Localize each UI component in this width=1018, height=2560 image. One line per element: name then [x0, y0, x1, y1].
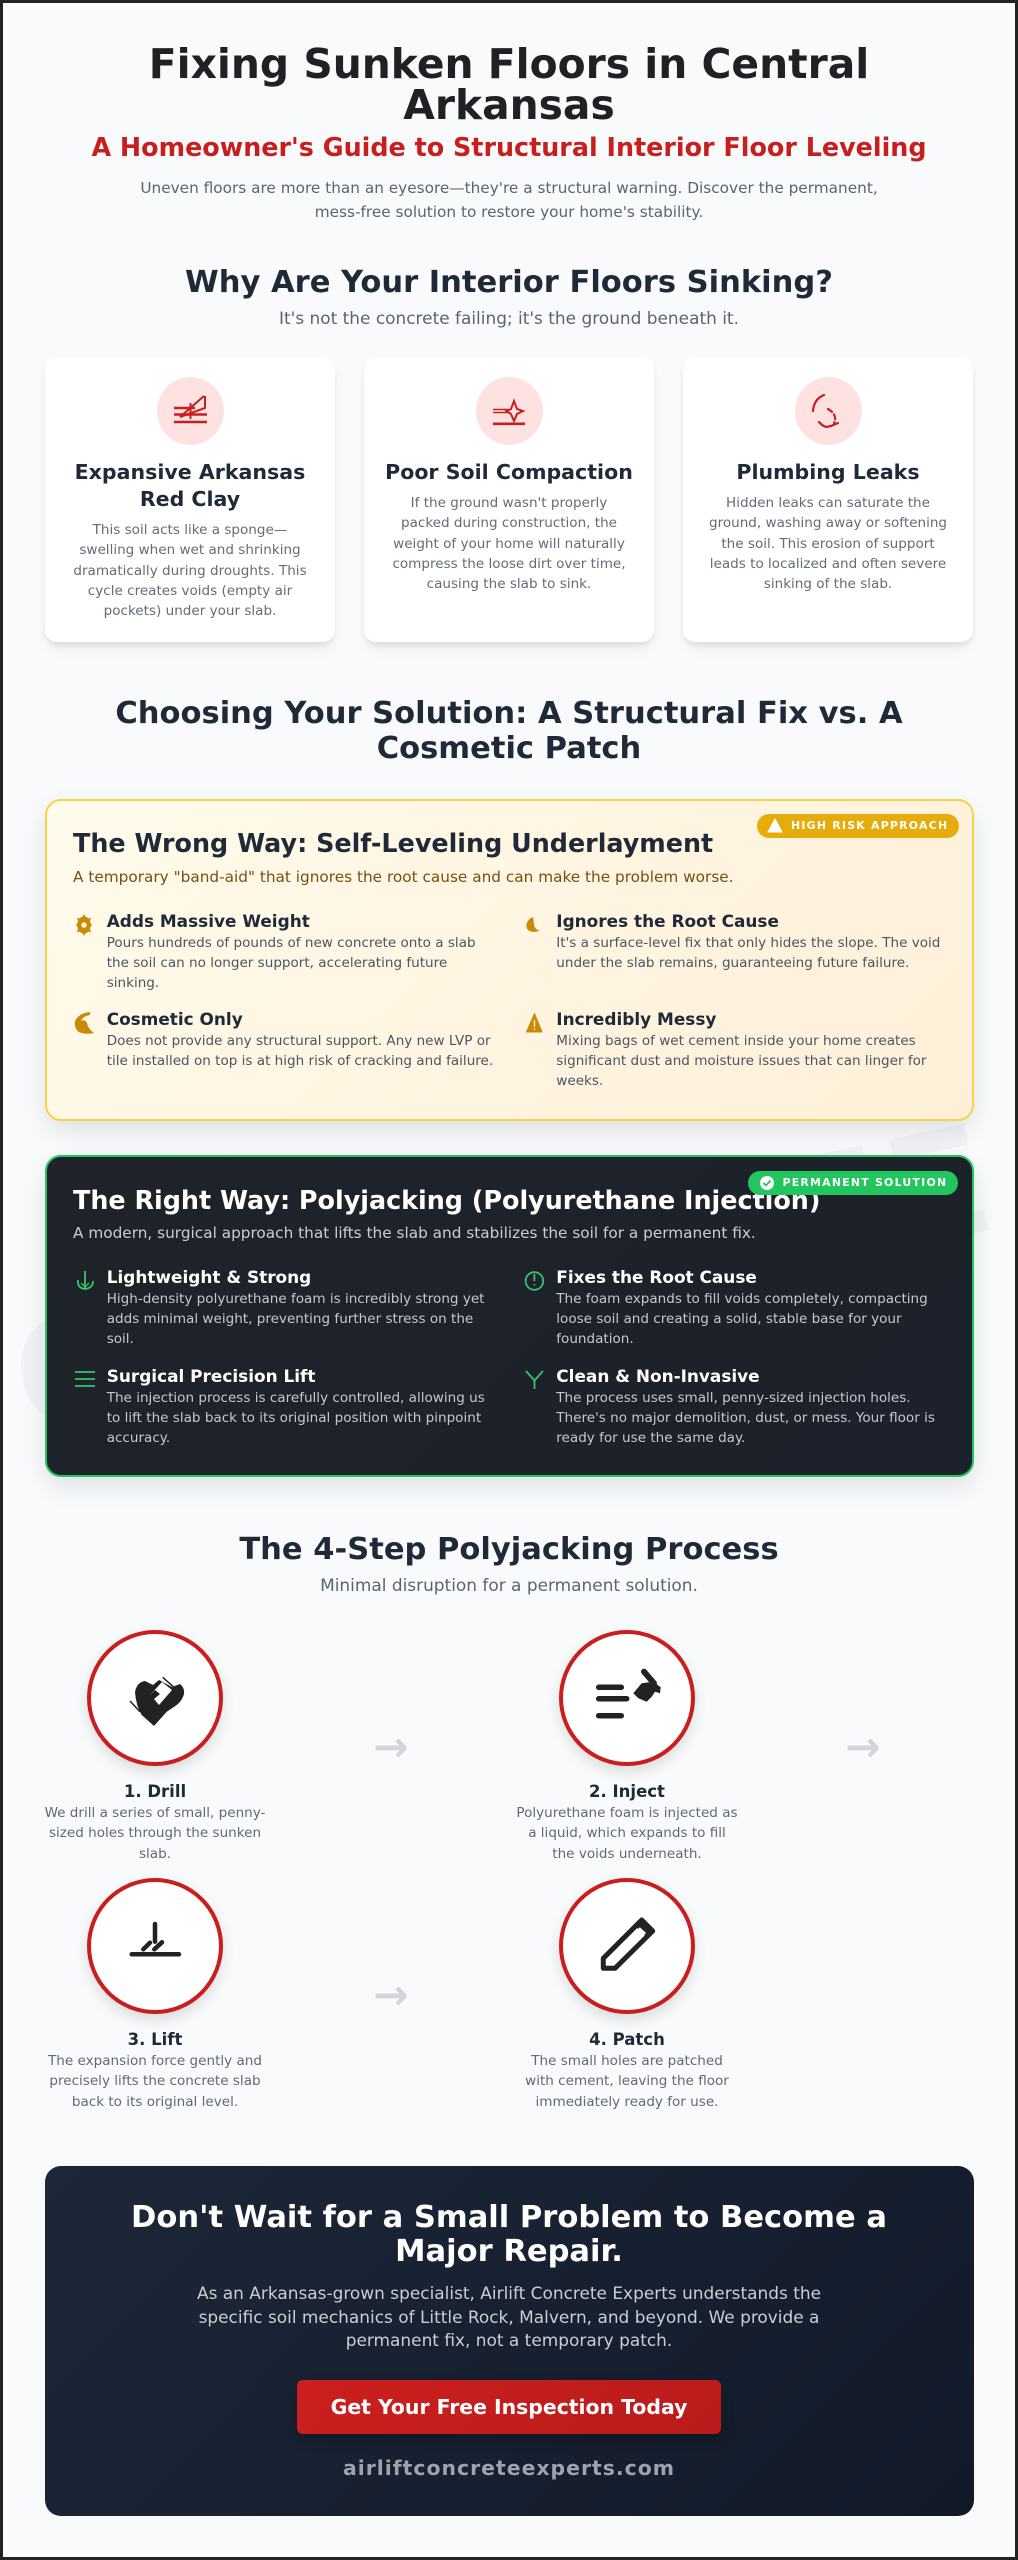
item: ignores root cause: It's a surface-level fix that only hides the slope. The void: [556, 935, 940, 951]
item: fixes root cause: The foam expands to fill voids completely, compacting: [556, 1291, 928, 1307]
card text: compress the loose dirt over time,: [392, 556, 626, 572]
cta text: permanent fix, not a temporary patch.: [346, 2330, 672, 2350]
cta heading: [131, 2200, 887, 2269]
title: [149, 40, 869, 129]
icon: pencil: [559, 1878, 695, 2014]
step text: precisely lifts the concrete slab: [49, 2073, 261, 2089]
icon: fork: [525, 1370, 544, 1389]
panel subtitle: A temporary "band-aid" that ignores the root cause and can make the problem worse.: [73, 868, 734, 886]
section heading: choosing your solution: [115, 696, 903, 766]
item: adds massive weight: Adds Massive Weight: [107, 911, 310, 931]
step title: 4. Patch: [589, 2030, 665, 2048]
item: incredibly messy: weeks.: [556, 1073, 603, 1089]
item: lightweight and strong: Lightweight & Strong: [107, 1267, 311, 1287]
card text: causing the slab to sink.: [427, 576, 591, 592]
title: Fixing Sunken Floors in Central: [149, 40, 869, 88]
item: fixes root cause: loose soil and creating a solid, stable base for your: [556, 1311, 902, 1327]
item: fixes root cause: Fixes the Root Cause: [556, 1267, 757, 1287]
item: ignores root cause: [526, 911, 940, 971]
card title: Poor Soil Compaction: [385, 460, 633, 484]
card: poor compaction: [364, 357, 654, 642]
panel subtitle: A modern, surgical approach that lifts the slab and stabilizes the soil for a permanent fix.: [73, 1224, 756, 1242]
item: lightweight and strong: [77, 1267, 484, 1347]
step text: [516, 1805, 738, 1862]
subheading: It's not the concrete failing; it's the ground beneath it.: [279, 308, 739, 328]
item: surgical precision lift: The injection process is carefully controlled, allowing us: [107, 1390, 485, 1406]
intro text: [140, 179, 878, 221]
item: clean and non-invasive: ready for use the same day.: [556, 1430, 745, 1446]
subheading: Minimal disruption for a permanent solution.: [320, 1575, 698, 1595]
call to action panel: [44, 2166, 974, 2516]
card text: [392, 495, 626, 592]
item: cosmetic only: Cosmetic Only: [107, 1009, 243, 1029]
step text: We drill a series of small, penny-: [45, 1805, 265, 1821]
item: adds massive weight: Pours hundreds of pounds of new concrete onto a slab: [107, 935, 476, 951]
card text: ground, washing away or softening: [709, 515, 947, 531]
cta button: [297, 2380, 721, 2434]
icon: warning triangle: [526, 1013, 542, 1032]
step text: [525, 2053, 729, 2110]
step text: The expansion force gently and: [48, 2053, 262, 2069]
item: lightweight and strong: High-density polyurethane foam is incredibly strong yet: [107, 1291, 484, 1307]
intro text: mess-free solution to restore your home's stability.: [315, 203, 703, 221]
icon: three lines: [75, 1371, 95, 1387]
step text: a liquid, which expands to fill: [528, 1825, 726, 1841]
card text: swelling when wet and shrinking: [79, 542, 301, 558]
card title: [75, 460, 305, 511]
title: Arkansas: [403, 81, 615, 129]
step text: sized holes through the sunken: [49, 1825, 261, 1841]
step 4: patch: [525, 1878, 729, 2110]
cta heading: Don't Wait for a Small Problem to Become a: [131, 2200, 887, 2234]
panel: right way: [44, 1155, 974, 1477]
item: cosmetic only: Does not provide any structural support. Any new LVP or: [107, 1033, 491, 1049]
item: incredibly messy: [526, 1009, 926, 1089]
icon: clock circle: [524, 1271, 544, 1291]
icon: clay: [156, 377, 224, 445]
subtitle: A Homeowner's Guide to Structural Interior Floor Leveling: [91, 132, 927, 162]
item: adds massive weight: [76, 911, 476, 991]
cta heading: Major Repair.: [395, 2234, 623, 2269]
card text: the soil. This erosion of support: [721, 536, 935, 552]
badge: high risk: [757, 814, 959, 838]
arrow: →: [845, 1722, 881, 1770]
card title: Expansive Arkansas: [75, 460, 305, 484]
heading: Why Are Your Interior Floors Sinking?: [185, 265, 833, 300]
item: surgical precision lift: accuracy.: [107, 1430, 170, 1446]
step 3: lift: [48, 1878, 262, 2110]
item: surgical precision lift: [75, 1366, 485, 1446]
step text: back to its original level.: [72, 2094, 238, 2110]
card text: [73, 522, 307, 619]
item: adds massive weight: the soil can no longer support, accelerating future: [107, 955, 447, 971]
step text: The small holes are patched: [531, 2053, 723, 2069]
item: incredibly messy: Mixing bags of wet cement inside your home creates: [556, 1033, 916, 1049]
item: cosmetic only: tile installed on top is at high risk of cracking and failure.: [107, 1053, 493, 1069]
card text: If the ground wasn't properly: [411, 495, 607, 511]
step title: 3. Lift: [128, 2030, 182, 2048]
icon: hook: [74, 1012, 94, 1034]
step text: the voids underneath.: [552, 1846, 702, 1862]
card text: dramatically during droughts. This: [73, 563, 307, 579]
website url: airliftconcreteexperts.com: [343, 2456, 675, 2480]
item: ignores root cause: under the slab remains, guaranteeing future failure.: [556, 955, 909, 971]
item: clean and non-invasive: There's no major demolition, dust, or mess. Your floor is: [556, 1410, 935, 1426]
item: adds massive weight: sinking.: [107, 975, 159, 991]
badge: permanent solution: [748, 1171, 958, 1195]
step text: with cement, leaving the floor: [525, 2073, 729, 2089]
step text: [48, 2053, 262, 2110]
section heading: 4-step process: [239, 1532, 779, 1595]
step title: 1. Drill: [124, 1782, 186, 1800]
intro text: Uneven floors are more than an eyesore—they're a structural warning. Discover the permanent,: [140, 179, 878, 197]
cta text: As an Arkansas-grown specialist, Airlift Concrete Experts understands the: [197, 2283, 821, 2303]
card text: leads to localized and often severe: [710, 556, 946, 572]
card text: Hidden leaks can saturate the: [726, 495, 930, 511]
card text: [709, 495, 947, 592]
section heading: choosing your solution: Cosmetic Patch: [377, 731, 641, 766]
card text: sinking of the slab.: [764, 576, 892, 592]
card text: weight of your home will naturally: [393, 536, 625, 552]
icon: anchor: [77, 1271, 94, 1290]
item: incredibly messy: Incredibly Messy: [556, 1009, 716, 1029]
icon: lift: [87, 1878, 223, 2014]
section heading: why floors sink: [185, 265, 833, 328]
heading: The 4-Step Polyjacking Process: [239, 1532, 779, 1567]
icon: leak: [794, 377, 862, 445]
cta text: specific soil mechanics of Little Rock, Malvern, and beyond. We provide a: [199, 2307, 819, 2327]
badge: high risk: HIGH RISK APPROACH: [791, 819, 948, 832]
step text: Polyurethane foam is injected as: [516, 1805, 738, 1821]
icon: crescent: [526, 917, 540, 932]
card title: Plumbing Leaks: [736, 460, 920, 484]
item: clean and non-invasive: [525, 1366, 935, 1446]
panel title: The Right Way: Polyjacking (Polyurethane Injection): [73, 1185, 820, 1215]
card title: Red Clay: [140, 487, 240, 511]
step 2: inject: [516, 1630, 738, 1862]
section heading: choosing your solution: Choosing Your Solution: A Structural Fix vs. A: [115, 696, 903, 731]
card text: pockets) under your slab.: [104, 603, 276, 619]
icon: gear: [76, 914, 92, 936]
panel title: The Wrong Way: Self-Leveling Underlayment: [73, 828, 713, 858]
background watermark: CONCRETE: [0, 1090, 1018, 1470]
item: lightweight and strong: soil.: [107, 1331, 134, 1347]
step title: 2. Inject: [589, 1782, 665, 1800]
card text: packed during construction, the: [401, 515, 617, 531]
step text: immediately ready for use.: [536, 2094, 718, 2110]
badge: permanent solution: PERMANENT SOLUTION: [782, 1176, 947, 1189]
cta text: [197, 2283, 821, 2350]
item: clean and non-invasive: The process uses small, penny-sized injection holes.: [556, 1390, 911, 1406]
item: fixes root cause: [524, 1267, 928, 1347]
cta button: Get Your Free Inspection Today: [331, 2395, 687, 2419]
arrow: →: [373, 1970, 409, 2018]
item: incredibly messy: significant dust and moisture issues that can linger for: [556, 1053, 926, 1069]
step text: slab.: [139, 1846, 171, 1862]
item: fixes root cause: foundation.: [556, 1331, 634, 1347]
step text: [45, 1805, 265, 1862]
card: plumbing leaks: [683, 357, 973, 642]
card: expansive clay: [45, 357, 335, 642]
item: cosmetic only: [74, 1009, 493, 1069]
step 1: drill: [45, 1630, 265, 1862]
item: lightweight and strong: adds minimal weight, preventing further stress on the: [107, 1311, 473, 1327]
arrow: →: [373, 1722, 409, 1770]
icon: compaction: [476, 377, 542, 445]
item: ignores root cause: Ignores the Root Cause: [556, 911, 779, 931]
icon: drill: [87, 1630, 223, 1766]
card text: This soil acts like a sponge—: [93, 522, 287, 538]
item: clean and non-invasive: Clean & Non-Invasive: [556, 1366, 760, 1386]
header: [91, 40, 927, 221]
icon: inject: [559, 1630, 695, 1766]
item: surgical precision lift: Surgical Precision Lift: [107, 1366, 315, 1386]
item: surgical precision lift: to lift the slab back to its original position with pinpoint: [107, 1410, 481, 1426]
panel: wrong way: [44, 799, 974, 1121]
card text: cycle creates voids (empty air: [88, 583, 292, 599]
